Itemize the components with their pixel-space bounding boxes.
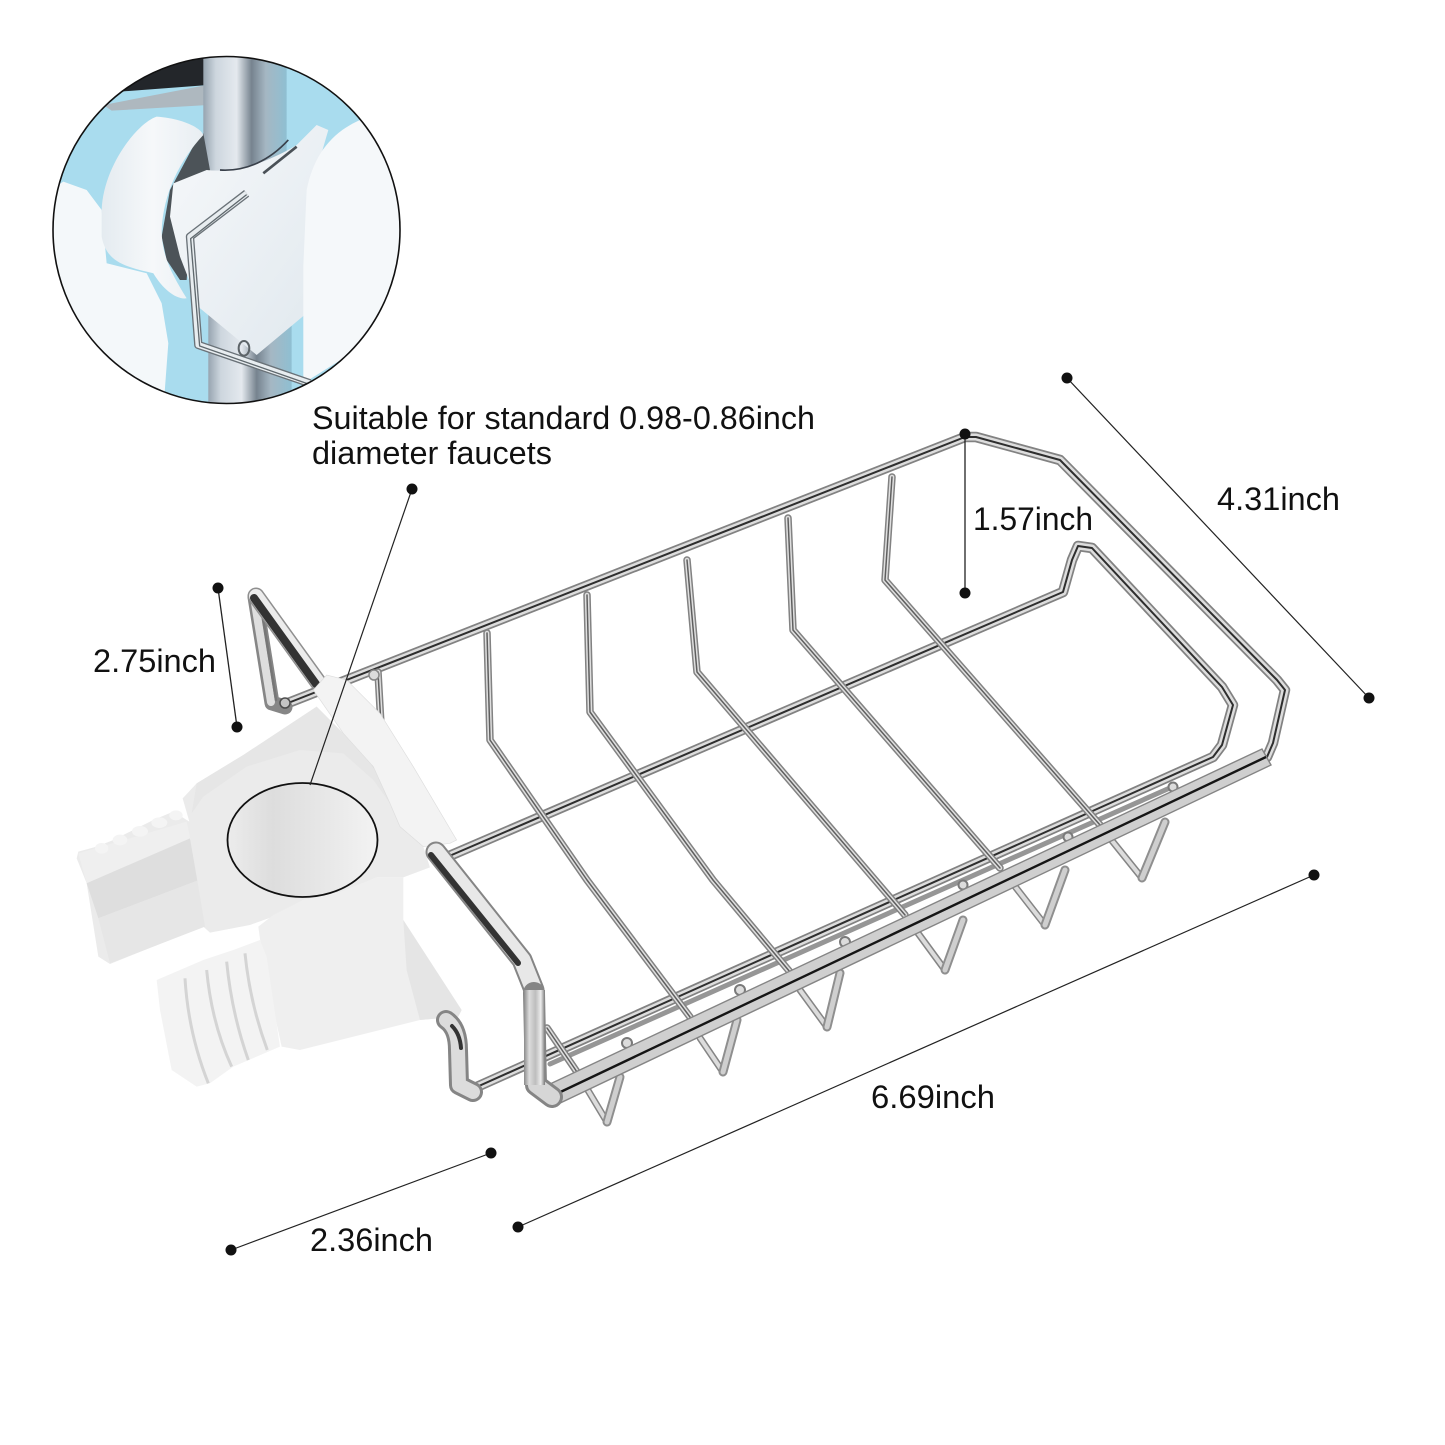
handle wire: back arm [254, 596, 379, 708]
white clamp [77, 675, 462, 1087]
weld points [622, 782, 1178, 1048]
callout: faucet diameter leader [310, 484, 418, 785]
handle wire: front arm and posts [431, 852, 552, 1097]
basket inner rims and long rod [283, 437, 1285, 1090]
dimension: length 6.69inch [512, 870, 1320, 1232]
product infographic [52, 56, 1374, 1256]
basket cross ribs [378, 477, 1100, 1072]
clamp: lower jaw [157, 877, 462, 1087]
dimension: clip height 2.75inch: 2.75inch [93, 643, 216, 679]
dimension: width 4.31inch [1062, 372, 1374, 704]
basket third rail [550, 787, 1172, 1064]
clamp: upper jaw [77, 707, 430, 964]
dimension: height 1.57inch: 1.57inch [973, 501, 1093, 537]
dimension: clip width 2.36inch: 2.36inch [310, 1222, 433, 1258]
dimension: width 4.31inch: 4.31inch [1217, 481, 1340, 517]
dimension: length 6.69inch: 6.69inch [871, 1079, 995, 1115]
dimension: clip width 2.36inch [226, 1148, 496, 1258]
clamp: top flap [313, 675, 457, 847]
callout text: faucet diameter: diameter faucets [312, 435, 552, 471]
basket outer front rail [550, 749, 1271, 1105]
faucet diameter ellipse [228, 783, 378, 897]
callout text: faucet diameter [312, 400, 815, 471]
dimension: height 1.57inch [960, 428, 1093, 598]
inset photo: clip on faucet [40, 50, 410, 410]
basket feet [577, 822, 1165, 1122]
dimension: clip height 2.75inch [93, 582, 242, 732]
callout text: faucet diameter: Suitable for standard 0.98-0.86inch [312, 400, 815, 436]
